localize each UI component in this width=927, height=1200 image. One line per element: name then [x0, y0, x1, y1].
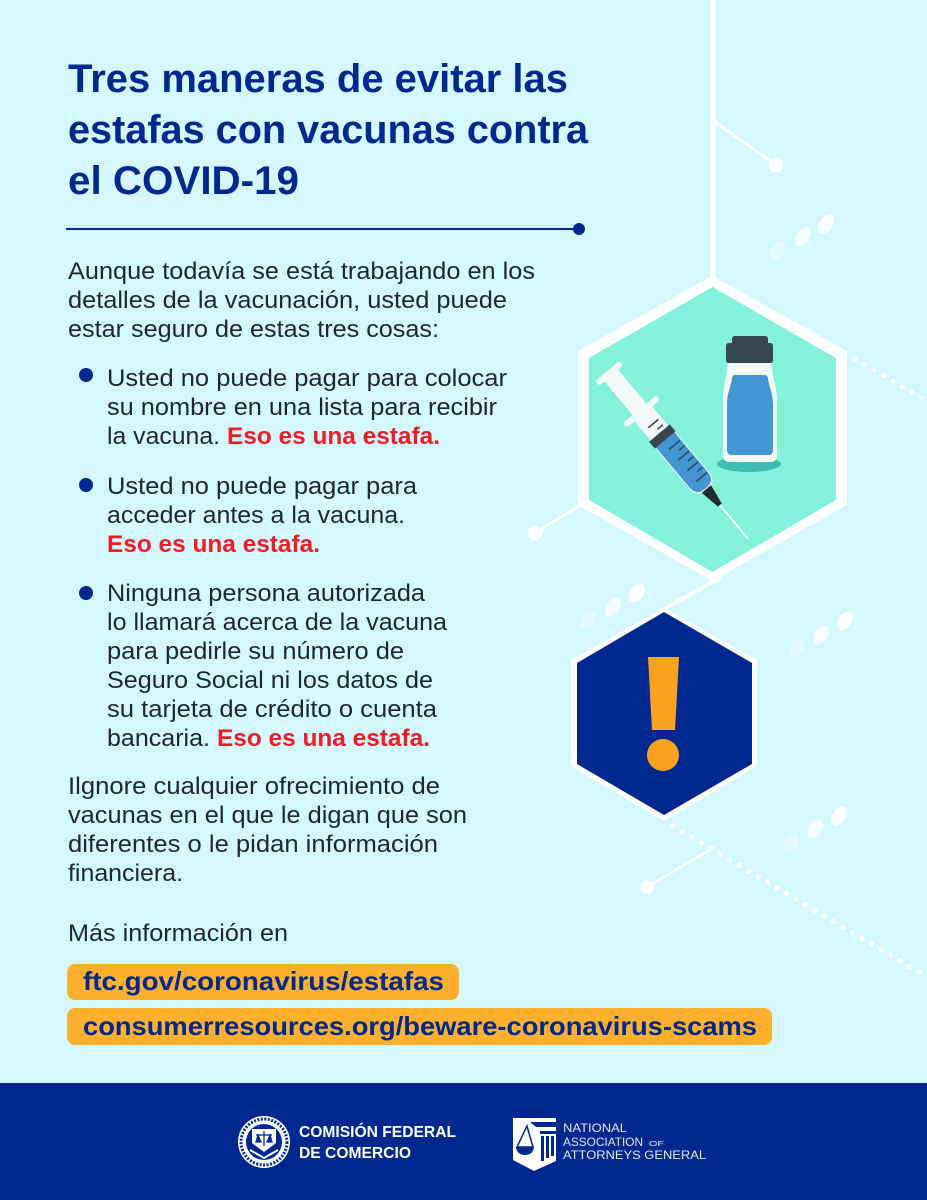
closing advice text: diferentes o le pidan información [68, 831, 438, 858]
bullet 1: su nombre en una lista para recibir [107, 394, 497, 421]
bullet 1: Usted no puede pagar para colocar [107, 365, 507, 392]
title: el COVID-19 [68, 159, 299, 203]
logo text: Comisión Federal de Comercio: COMISIÓN FEDERAL [299, 1122, 456, 1141]
title [68, 57, 589, 203]
bullet 1 [79, 365, 507, 450]
logo: FTC seal [238, 1116, 290, 1168]
bullet 3: Seguro Social ni los datos de [107, 667, 433, 694]
bullet 3: su tarjeta de crédito o cuenta [107, 696, 438, 723]
bullet 3 [79, 580, 448, 752]
hexagon: vaccine and syringe [578, 276, 847, 581]
logo text: National Association of Attorneys General: NATIONAL [563, 1121, 627, 1135]
logo: NAAG shield [513, 1118, 556, 1171]
closing advice text: Ilgnore cualquier ofrecimiento de [68, 773, 440, 800]
icon: exclamation mark [647, 657, 679, 771]
title: estafas con vacunas contra [68, 108, 589, 152]
logo text: Comisión Federal de Comercio [299, 1122, 456, 1162]
closing advice text: vacunas en el que le digan que son [68, 802, 467, 829]
bullet 2: acceder antes a la vacuna. [107, 502, 405, 529]
intro text: Aunque todavía se está trabajando en los [68, 258, 535, 285]
bullet 3: para pedirle su número de [107, 638, 404, 665]
bullet 2: Eso es una estafa. [107, 531, 320, 558]
bullet 1: Eso es una estafa. [227, 423, 440, 450]
bullet 3: lo llamará acerca de la vacuna [107, 609, 448, 636]
icon: vaccine vial [717, 336, 781, 472]
logo text: National Association of Attorneys General: ASSOCIATION [563, 1135, 643, 1149]
logo text: National Association of Attorneys General [563, 1121, 706, 1162]
title: Tres maneras de evitar las [68, 57, 568, 101]
bullet 1: la vacuna. [107, 423, 220, 450]
bullet 3: Ninguna persona autorizada [107, 580, 426, 607]
logo text: Comisión Federal de Comercio: DE COMERCIO [299, 1145, 411, 1162]
link pill: consumer resources: consumerresources.org/beware-coronavirus-scams [83, 1011, 757, 1041]
closing advice text [68, 773, 467, 887]
intro text: estar seguro de estas tres cosas: [68, 316, 439, 343]
icon: syringe [591, 357, 765, 553]
logo text: National Association of Attorneys General: ATTORNEYS GENERAL [563, 1148, 706, 1162]
link pill: ftc: ftc.gov/coronavirus/estafas [83, 966, 444, 996]
intro text [68, 258, 535, 343]
bullet 2 [79, 473, 418, 558]
footer band [0, 1083, 927, 1200]
bullet 3: Eso es una estafa. [217, 725, 430, 752]
closing advice text: financiera. [68, 860, 183, 887]
logo text: National Association of Attorneys General: OF [649, 1141, 664, 1148]
bullet 2: Usted no puede pagar para [107, 473, 418, 500]
hexagon: warning exclamation [571, 608, 757, 821]
more information label: Más información en [68, 920, 288, 947]
intro text: detalles de la vacunación, usted puede [68, 287, 507, 314]
bullet 3: bancaria. [107, 725, 210, 752]
